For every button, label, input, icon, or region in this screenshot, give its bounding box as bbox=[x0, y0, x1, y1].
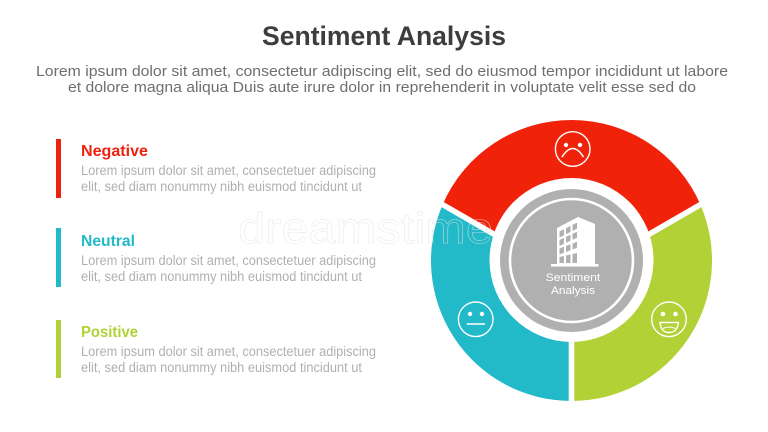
positive body text bbox=[81, 344, 376, 375]
subtitle text bbox=[36, 63, 728, 96]
negative body text bbox=[81, 163, 376, 194]
hub gray disc bbox=[500, 189, 643, 332]
segment separators bbox=[439, 202, 704, 404]
neutral body text: Lorem ipsum dolor sit amet, consectetuer adipiscing bbox=[81, 253, 376, 268]
hub white ring bbox=[490, 178, 654, 342]
subtitle text: Lorem ipsum dolor sit amet, consectetur adipiscing elit, sed do eiusmod tempor incididunt ut labore bbox=[36, 63, 728, 80]
negative body text: elit, sed diam nonummy nibh euismod tincidunt ut bbox=[81, 179, 362, 194]
title: Sentiment Analysis bbox=[262, 21, 506, 51]
center hub bbox=[490, 178, 654, 342]
icon: neutral face bbox=[458, 302, 493, 337]
negative heading: Negative bbox=[81, 143, 148, 160]
positive body text: Lorem ipsum dolor sit amet, consectetuer adipiscing bbox=[81, 344, 376, 359]
donut chart bbox=[431, 120, 712, 404]
segment: neutral bbox=[431, 205, 572, 401]
hub label: Analysis bbox=[551, 285, 596, 297]
hub label: Sentiment bbox=[546, 272, 600, 284]
neutral body text: elit, sed diam nonummy nibh euismod tincidunt ut bbox=[81, 269, 362, 284]
negative accent bar bbox=[56, 139, 61, 198]
neutral accent bar bbox=[56, 228, 61, 287]
icon: building bbox=[551, 217, 598, 267]
panel: neutral item bbox=[56, 228, 376, 287]
subtitle text: et dolore magna aliqua Duis aute irure dolor in reprehenderit in voluptate velit esse sed do bbox=[68, 79, 696, 96]
neutral body text bbox=[81, 253, 376, 284]
segment: negative bbox=[443, 120, 700, 279]
panel: negative item bbox=[56, 139, 376, 198]
neutral heading: Neutral bbox=[81, 233, 135, 250]
hub label bbox=[546, 272, 600, 297]
watermark: dreamstime bbox=[238, 204, 493, 253]
hub inner ring bbox=[510, 199, 633, 322]
icon: happy face bbox=[652, 302, 686, 337]
panel: positive item bbox=[56, 320, 376, 378]
icon: sad face bbox=[555, 132, 590, 166]
positive accent bar bbox=[56, 320, 61, 378]
positive body text: elit, sed diam nonummy nibh euismod tincidunt ut bbox=[81, 360, 362, 375]
positive heading: Positive bbox=[81, 324, 138, 341]
negative body text: Lorem ipsum dolor sit amet, consectetuer adipiscing bbox=[81, 163, 376, 178]
segment: positive bbox=[572, 205, 712, 401]
